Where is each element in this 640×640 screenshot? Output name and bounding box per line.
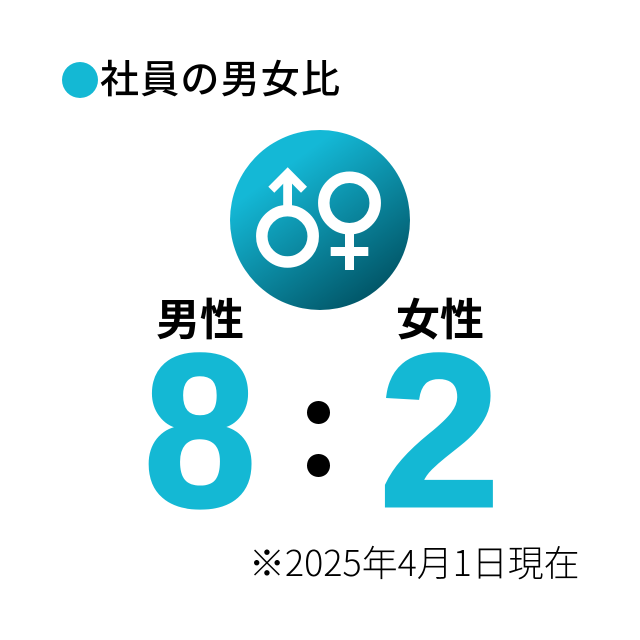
number: female ratio: 2: [379, 310, 500, 552]
heading bullet: [62, 62, 98, 98]
male symbol: [262, 167, 313, 262]
label: male: 男性: [156, 284, 244, 348]
ratio colon: [307, 401, 330, 477]
number: male ratio: 8: [144, 310, 256, 552]
female symbol: [324, 177, 375, 270]
footnote: ※2025年4月1日現在: [249, 535, 580, 587]
icon: gender symbols: [230, 130, 410, 310]
heading: 社員の男女比: [100, 49, 341, 105]
label: female: 女性: [396, 284, 484, 348]
